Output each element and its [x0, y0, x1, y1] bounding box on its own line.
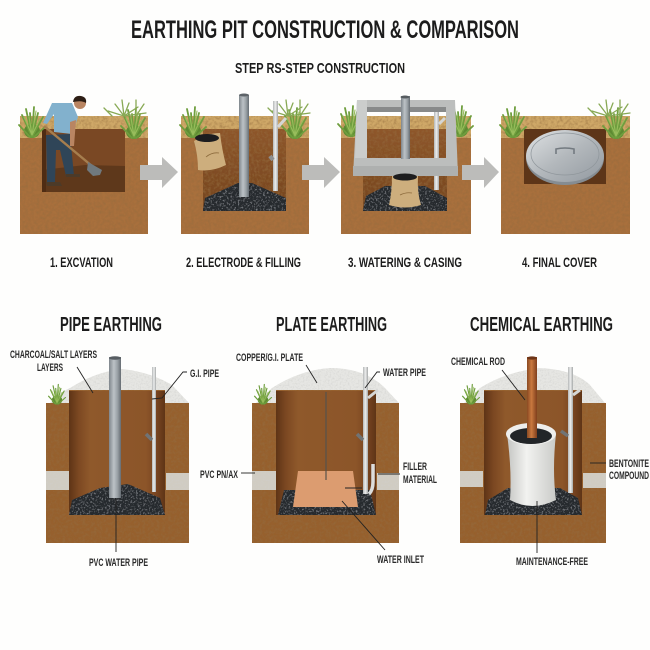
- label: pvc water pipe: PVC WATER PIPE: [89, 557, 148, 569]
- soil block: [46, 390, 189, 543]
- label: chemical rod: [451, 356, 525, 400]
- label: pvc water pipe: [89, 498, 148, 569]
- label: water inlet: WATER INLET: [377, 554, 424, 566]
- icon: grass right: [268, 100, 310, 139]
- charcoal mound: [363, 186, 447, 211]
- charcoal bed: [278, 490, 376, 515]
- label: filler material: [378, 461, 437, 486]
- hanging wire: [325, 392, 327, 480]
- icon: worker with shovel: [43, 96, 102, 186]
- panel: step 3 watering and casing: [338, 96, 473, 234]
- soil block: [460, 390, 606, 543]
- sand band left: [460, 471, 483, 487]
- label: water pipe: [365, 367, 426, 388]
- copper rod: [527, 356, 537, 438]
- water pipe: [561, 367, 580, 493]
- charcoal bag: [389, 174, 421, 208]
- label: filler material: FILLER: [403, 461, 427, 473]
- charcoal bag: [194, 133, 226, 170]
- sand band right: [377, 473, 399, 490]
- icon: grass: [255, 384, 271, 405]
- panel: chemical earthing diagram: [460, 356, 606, 543]
- sand band left: [46, 471, 69, 490]
- label: bentonite compound: [590, 458, 649, 482]
- step labels: 2. ELECTRODE & FILLING: [186, 254, 301, 270]
- gravel mound: [464, 368, 605, 403]
- water pipe: [357, 367, 378, 494]
- panel: step 2 electrode and filling: [180, 94, 310, 234]
- heading: plate earthing: PLATE EARTHING: [276, 314, 387, 336]
- label: g.i. pipe: [152, 368, 219, 399]
- sand band right: [583, 473, 606, 488]
- pit: [42, 129, 125, 192]
- panel: plate earthing diagram: [252, 367, 399, 543]
- concrete casing frame: [353, 100, 458, 176]
- step labels: 4. FINAL COVER: [522, 254, 597, 270]
- label: pvc pn/ax: PVC PN/AX: [200, 469, 238, 481]
- electrode pipe: [239, 94, 249, 197]
- label: charcoal/salt layers: [10, 349, 97, 393]
- icon: grass left: [19, 107, 45, 138]
- copper plate: [293, 471, 358, 507]
- electrode pipe: [109, 356, 121, 498]
- label: plate marker: [345, 487, 362, 489]
- panel: step 4 final cover: [500, 100, 630, 234]
- icon: grass: [500, 100, 630, 139]
- icon: manhole lid: [526, 130, 604, 185]
- pit: [524, 129, 606, 184]
- water pipe: [146, 367, 156, 492]
- label: filler material: MATERIAL: [403, 474, 437, 486]
- charcoal mound: [203, 183, 286, 211]
- label: maintenance-free: MAINTENANCE-FREE: [516, 556, 588, 568]
- icon: grass right: [104, 100, 147, 139]
- heading: pipe earthing: PIPE EARTHING: [60, 314, 162, 336]
- pit: [363, 129, 447, 211]
- label: maintenance-free: [516, 501, 588, 568]
- label: charcoal/salt layers: CHARCOAL/SALT LAYERS: [10, 349, 97, 361]
- panel: pipe earthing diagram: [46, 356, 189, 543]
- icon: grass: [463, 384, 479, 405]
- charcoal mound: [69, 484, 165, 515]
- label: charcoal/salt layers: LAYERS: [37, 362, 63, 374]
- charcoal mound: [485, 488, 582, 515]
- step labels: [50, 254, 597, 270]
- gravel mound: [50, 369, 189, 403]
- step labels: 1. EXCVATION: [50, 254, 113, 270]
- sand band left: [252, 471, 276, 490]
- water pipe: [270, 101, 286, 191]
- label: chemical rod: CHEMICAL ROD: [451, 356, 505, 368]
- sand band right: [166, 473, 189, 490]
- icon: grass: [49, 384, 65, 405]
- gravel mound: [256, 368, 399, 403]
- pit: [276, 391, 376, 515]
- pit: [203, 129, 286, 211]
- label: water inlet: [342, 501, 424, 566]
- pit: [69, 391, 165, 515]
- icon: grass: [338, 106, 473, 137]
- label: copper/g.i. plate: [236, 352, 317, 383]
- subtitle: STEP RS-STEP CONSTRUCTION: [235, 60, 405, 77]
- pit: [484, 391, 582, 515]
- label: g.i. pipe: G.I. PIPE: [190, 368, 219, 380]
- arrow 1: [140, 157, 178, 188]
- step labels: 3. WATERING & CASING: [348, 254, 462, 270]
- label: water pipe: WATER PIPE: [383, 367, 426, 379]
- electrode pipe: [400, 96, 410, 159]
- icon: grass left: [180, 107, 206, 138]
- label: copper/g.i. plate: COPPER/G.I. PLATE: [236, 352, 303, 364]
- arrow 3: [462, 157, 499, 188]
- white chemical sack: [506, 423, 556, 506]
- water pipe: [434, 112, 445, 190]
- panel: step 1 excavation: [19, 96, 148, 234]
- arrow 2: [302, 157, 340, 188]
- soil block: [252, 390, 399, 543]
